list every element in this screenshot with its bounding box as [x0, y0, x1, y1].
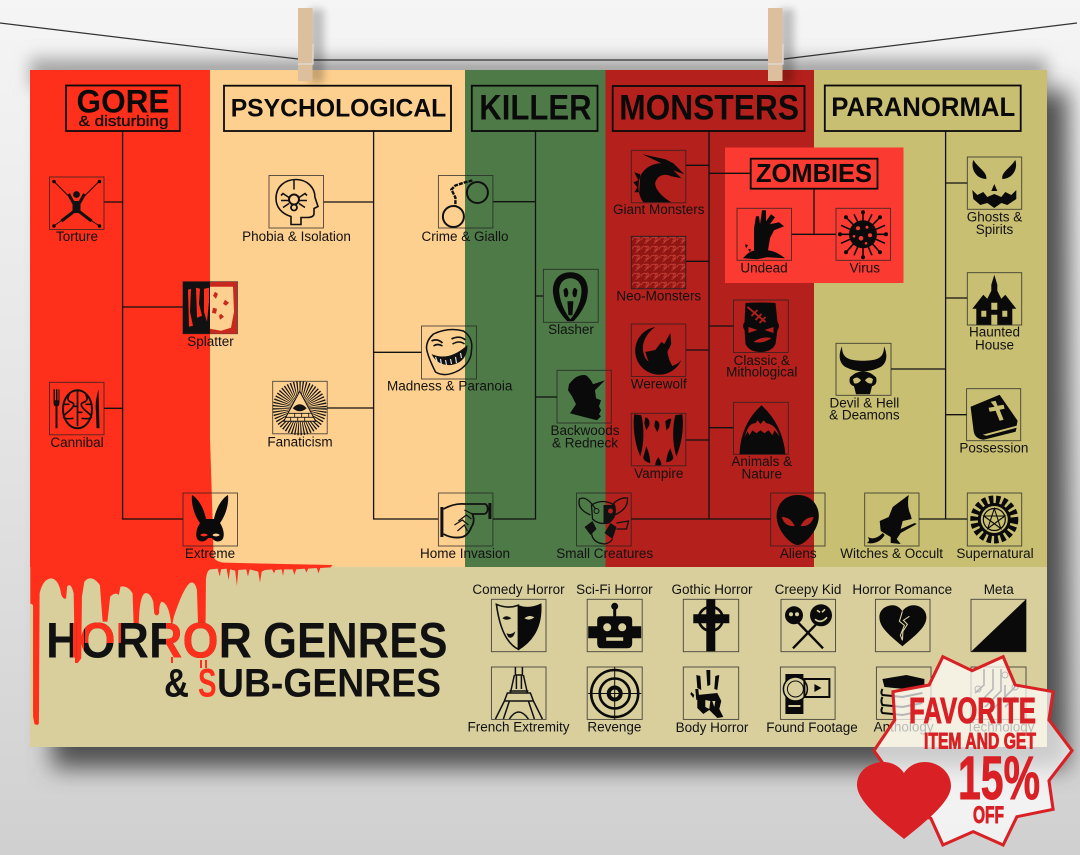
icon: zombie hand: [737, 208, 792, 260]
label: Cannibal: [50, 435, 104, 450]
legend: Body Horror: Body Horror: [676, 720, 749, 735]
label: Haunted: [969, 325, 1020, 340]
label: [967, 209, 1022, 237]
label: Torture: [56, 229, 98, 244]
legend: Technology: [966, 667, 1035, 735]
panel: paranormal column: [814, 70, 1047, 567]
heading: GORE: & disturbing: [78, 113, 168, 130]
title word: GENRES: GENRES: [263, 612, 448, 668]
icon: Frankenstein monster: [734, 300, 788, 352]
label: [829, 395, 900, 423]
legend: Body Horror: [676, 667, 749, 735]
panel: gore column: [30, 70, 210, 567]
label: Possession: [959, 441, 1028, 456]
panel: killer column: [465, 70, 606, 567]
panel: psychological column: [210, 70, 465, 567]
legend: Comedy Horror: Comedy Horror: [472, 582, 565, 597]
panel: zombies: [725, 148, 904, 283]
label: Giant Monsters: [613, 202, 705, 217]
heading: PSYCHOLOGICAL: PSYCHOLOGICAL: [231, 95, 446, 123]
legend: Comedy Horror: [472, 582, 565, 652]
poster: [30, 70, 1047, 747]
icon: scream mask: [543, 269, 598, 322]
label: Werewolf: [631, 376, 687, 391]
icon: celtic cross: [683, 599, 739, 652]
icon: comedy tragedy mask: [491, 599, 546, 652]
badge star: [874, 657, 1072, 845]
icon: all-seeing eye pyramid: [273, 381, 327, 434]
label: Phobia & Isolation: [242, 229, 351, 244]
node: Neo-Monsters: [616, 236, 701, 304]
icon: redneck profile: [557, 370, 611, 423]
node: Extreme: [183, 493, 238, 561]
heading: GORE: GORE: [76, 84, 170, 120]
icon: horned skull: [836, 343, 891, 395]
legend: French Extremity: [467, 667, 570, 735]
node: Supernatural: [956, 493, 1034, 561]
title word: UB-GENRES: UB-GENRES: [217, 662, 441, 706]
icon: left peg: [298, 8, 324, 83]
connector lines: [104, 131, 967, 519]
node: Fanaticism: [267, 381, 333, 450]
legend: Horror Romance: Horror Romance: [852, 582, 952, 597]
node: Crime & Giallo: [421, 176, 509, 244]
node: Cannibal: [50, 382, 104, 450]
label: Devil & Hell: [830, 395, 899, 410]
icon: witch on broom: [865, 493, 919, 546]
label: Backwoods: [550, 423, 620, 438]
label: Witches & Occult: [840, 546, 943, 561]
label: Slasher: [548, 322, 594, 337]
node: Undead: [737, 208, 792, 276]
label: Fanaticism: [267, 435, 333, 450]
icon: circuit: [971, 667, 1026, 719]
node: Slasher: [543, 269, 598, 337]
label: Aliens: [780, 546, 817, 561]
label: Crime & Giallo: [421, 229, 509, 244]
icon: holy book: [967, 389, 1021, 441]
label: House: [975, 337, 1014, 352]
icon: heart: [857, 762, 951, 839]
icon: robot: [587, 599, 642, 652]
badge text: [909, 690, 1040, 829]
heading: KILLER: KILLER: [479, 88, 592, 127]
icon: bloody hand print: [683, 667, 739, 719]
icon: sun with pentagram: [967, 493, 1022, 546]
legend: Gothic Horror: Gothic Horror: [671, 582, 753, 597]
node: Virus: [836, 208, 890, 276]
label: Splatter: [187, 334, 234, 349]
title word red overlay: HORROR: [46, 612, 252, 668]
icon: ghost pumpkin face: [967, 157, 1022, 209]
heading: PSYCHOLOGICAL: [224, 86, 451, 131]
node: Small Creatures: [556, 493, 653, 561]
icon: troll face: [422, 326, 476, 379]
legend: Revenge: Revenge: [587, 720, 641, 735]
title word: HORROR: HORROR: [46, 612, 252, 668]
node: Vampire: [631, 413, 686, 481]
label: Madness & Paranoia: [387, 379, 513, 394]
badge text: ITEM AND GET: [924, 728, 1036, 754]
label: Supernatural: [956, 546, 1034, 561]
icon: eiffel tower: [491, 667, 546, 719]
badge text: 15%: [958, 744, 1040, 812]
heading: PARANORMAL: PARANORMAL: [831, 92, 1015, 122]
legend: Technology: Technology: [966, 720, 1035, 735]
icon: swirl texture: [631, 236, 686, 289]
legend: Creepy Kid: [775, 582, 841, 652]
node: Splatter: [183, 282, 238, 349]
node: Haunted House: [967, 273, 1022, 352]
panel: legend strip: [30, 567, 1047, 747]
node: Phobia & Isolation: [242, 176, 351, 244]
heading: GORE: [66, 84, 180, 131]
icon: alien head: [771, 493, 825, 546]
label: Classic &: [734, 353, 790, 368]
node: Madness & Paranoia: [387, 326, 513, 394]
heading: ZOMBIES: ZOMBIES: [756, 158, 872, 188]
label: Small Creatures: [556, 546, 653, 561]
label: Vampire: [634, 466, 683, 481]
clothesline: [0, 23, 1077, 60]
label: Animals &: [731, 454, 792, 469]
icon: crossed lollipops: [781, 599, 836, 652]
node: Witches & Occult: [840, 493, 943, 561]
node: Home Invasion: [420, 493, 510, 561]
icon: wolf and crescent moon: [631, 324, 686, 376]
legend: Anthology: [874, 667, 934, 735]
node: Torture: [50, 177, 104, 244]
node: Devil & Hell & Deamons: [829, 343, 900, 423]
panel: monsters column: [606, 70, 814, 567]
icon: gremlin: [576, 493, 631, 546]
badge text: OFF: [973, 802, 1004, 829]
icon: stack of books: [876, 667, 931, 719]
heading: MONSTERS: MONSTERS: [619, 89, 799, 128]
label: Extreme: [185, 546, 235, 561]
icon: fangs: [631, 413, 686, 466]
title: [49, 622, 446, 697]
legend: Meta: [971, 582, 1026, 652]
icon: right peg: [768, 8, 794, 83]
icon: head with spider: [269, 176, 324, 228]
node: Possession: [959, 389, 1028, 456]
node: Giant Monsters: [613, 150, 705, 217]
label: [550, 423, 620, 450]
node: Werewolf: [631, 324, 687, 391]
label: [731, 454, 792, 481]
legend: Revenge: [587, 667, 642, 735]
small drips under title: [76, 657, 206, 668]
node: Classic & Mithological: [726, 300, 797, 380]
node: Animals & Nature: [731, 402, 792, 481]
legend: Found Footage: [766, 667, 858, 735]
label: [726, 353, 797, 380]
icon: pointing hand: [438, 493, 493, 546]
label: Neo-Monsters: [616, 288, 701, 304]
icon: handcuffs: [438, 176, 493, 228]
legend: Meta: Meta: [984, 582, 1014, 597]
badge: favorite item discount: [857, 657, 1072, 845]
legend: Anthology: Anthology: [874, 720, 934, 735]
clothes pegs: [298, 8, 794, 83]
label: & Deamons: [829, 408, 900, 423]
title ampersand: &: [164, 662, 189, 706]
node: Aliens: [771, 493, 825, 561]
icon: blood splatter: [183, 282, 238, 334]
legend: Sci-Fi Horror: Sci-Fi Horror: [576, 582, 653, 597]
icon: haunted house: [967, 273, 1022, 325]
legend: Horror Romance: [852, 582, 952, 652]
poster shadow: [52, 90, 1068, 768]
label: Ghosts &: [967, 209, 1022, 224]
legend: Found Footage: Found Footage: [766, 720, 858, 735]
icon: shark: [734, 402, 788, 454]
legend: Sci-Fi Horror: [576, 582, 653, 652]
title letter: S: S: [198, 662, 216, 706]
legend: French Extremity: French Extremity: [467, 720, 570, 735]
blood drip: [30, 440, 332, 725]
icon: target: [587, 667, 642, 720]
label: Nature: [742, 466, 782, 481]
icon: virus: [836, 208, 890, 260]
label: & Redneck: [552, 435, 618, 450]
poster top shadow: [30, 58, 1047, 88]
heading: PARANORMAL: [825, 86, 1021, 131]
node: Backwoods & Redneck: [550, 370, 620, 450]
label: Home Invasion: [420, 546, 510, 561]
icon: broken heart: [875, 599, 930, 652]
node: Ghosts & Spirits: [967, 157, 1022, 237]
icon: half triangle: [971, 599, 1026, 652]
icon: bunny mask: [183, 493, 238, 546]
icon: spread-eagled figure: [50, 177, 104, 230]
icon: camcorder: [780, 667, 835, 719]
label: [969, 325, 1020, 352]
label: Virus: [849, 261, 880, 276]
label: Mithological: [726, 365, 797, 380]
label: Spirits: [976, 222, 1013, 237]
icon: dragon: [631, 150, 686, 203]
label: Undead: [740, 261, 788, 276]
icon: brain with knife and fork: [50, 382, 104, 435]
legend: Gothic Horror: [671, 582, 753, 652]
legend: Creepy Kid: Creepy Kid: [775, 582, 841, 597]
